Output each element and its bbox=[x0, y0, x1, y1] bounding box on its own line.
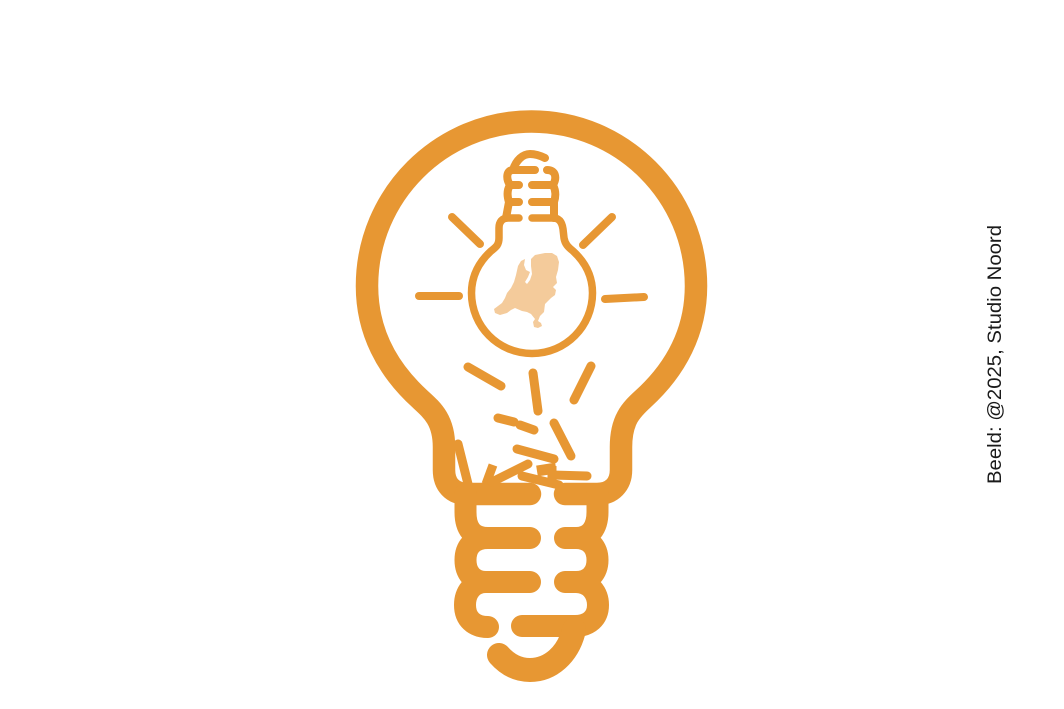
large bulb hook bbox=[499, 630, 574, 670]
icon: large light bulb bbox=[367, 122, 696, 670]
pellets falling into the base bbox=[458, 366, 591, 486]
small bulb thread bbox=[506, 154, 555, 218]
image credit: Beeld: @2025, Studio Noord bbox=[984, 225, 1006, 484]
icon: small light bulb bbox=[419, 154, 644, 354]
map of the Netherlands bbox=[494, 253, 559, 328]
large bulb screw thread left bbox=[465, 494, 530, 627]
large bulb glass outline bbox=[367, 122, 696, 494]
large bulb screw thread right bbox=[522, 494, 598, 626]
small bulb glass bbox=[472, 218, 592, 354]
rays around small bulb bbox=[419, 217, 644, 299]
